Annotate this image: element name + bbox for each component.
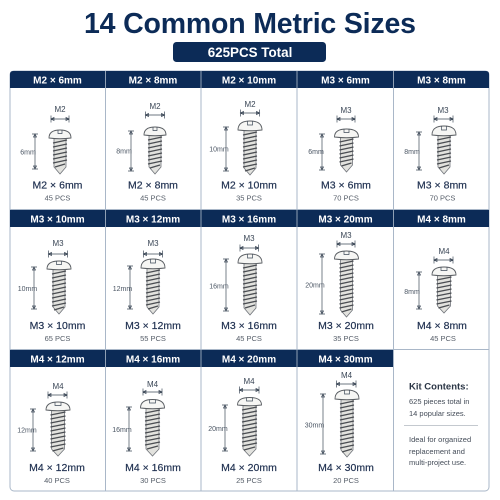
cell: M4 x 30mm: M4 × 30mm xyxy=(318,462,374,474)
header row 1 xyxy=(10,71,489,88)
title: 14 Common Metric Sizes xyxy=(84,8,416,40)
header row 2: M3 × 12mm xyxy=(126,214,180,226)
cell: M2 x 6mm: M2 × 6mm xyxy=(33,180,83,192)
cell: M4 x 12mm: 40 PCS xyxy=(44,476,70,485)
header row 1: M2 × 8mm xyxy=(129,76,177,86)
header row 1: M2 × 10mm xyxy=(222,76,276,86)
cell: M3 x 6mm: M3 xyxy=(340,106,352,115)
cell: M2 x 6mm: 45 PCS xyxy=(45,194,70,202)
cell: M3 x 20mm: 20mm xyxy=(305,282,325,290)
cell: M3 x 16mm xyxy=(209,234,277,343)
cell: M4 x 16mm xyxy=(112,380,181,485)
cell: M3 x 10mm: 10mm xyxy=(18,286,37,293)
cell: M4 x 8mm: M4 xyxy=(438,247,450,256)
header row 3: M4 × 20mm xyxy=(222,354,276,366)
cell: M2 x 8mm: M2 xyxy=(149,102,161,111)
cell: M2 x 8mm: 8mm xyxy=(116,148,132,156)
kit contents note: replacement and xyxy=(409,447,465,456)
cell: M4 x 12mm: 12mm xyxy=(17,428,37,434)
cell: M2 x 10mm xyxy=(209,100,277,202)
cell: M3 x 6mm xyxy=(308,106,371,202)
header row 3: M4 × 12mm xyxy=(30,354,85,366)
cell: M3 x 8mm: 70 PCS xyxy=(430,194,455,202)
cell: M3 x 8mm: M3 xyxy=(437,106,449,115)
cell: M4 x 20mm: 20mm xyxy=(208,426,228,433)
kit contents note: 14 popular sizes. xyxy=(409,409,466,418)
header row 1: M3 × 8mm xyxy=(417,76,466,86)
kit contents note xyxy=(404,382,478,467)
header row 3: M4 × 30mm xyxy=(318,354,373,366)
total badge xyxy=(173,42,326,62)
cell: M4 x 16mm: 16mm xyxy=(112,427,132,434)
header row 2: M3 × 10mm xyxy=(30,214,85,226)
cell: M3 x 20mm xyxy=(305,231,374,343)
cell: M3 x 12mm: 55 PCS xyxy=(140,334,166,343)
header row 2 xyxy=(10,210,489,227)
header row 1: M2 × 6mm xyxy=(33,76,82,86)
cell: M2 x 10mm: 10mm xyxy=(209,146,229,154)
cell: M4 x 20mm xyxy=(208,377,277,485)
header row 1: M3 × 6mm xyxy=(321,76,370,86)
cell: M3 x 20mm: 35 PCS xyxy=(333,334,359,343)
cell: M2 x 8mm: 45 PCS xyxy=(140,194,166,202)
cell: M4 x 16mm: M4 xyxy=(147,380,159,389)
cell: M3 x 16mm: M3 × 16mm xyxy=(221,320,277,332)
cell: M2 x 8mm xyxy=(116,102,178,202)
cell: M3 x 12mm: M3 × 12mm xyxy=(125,320,181,332)
cell: M4 x 8mm: 8mm xyxy=(404,289,420,296)
cell: M2 x 10mm: M2 × 10mm xyxy=(221,180,277,192)
cell: M4 x 20mm: M4 xyxy=(243,377,255,386)
cell: M4 x 12mm: M4 × 12mm xyxy=(29,462,85,474)
kit contents note: multi-project use. xyxy=(409,458,466,467)
cell: M3 x 8mm: M3 × 8mm xyxy=(417,180,467,192)
cell: M4 x 20mm: 25 PCS xyxy=(236,476,262,485)
cell: M4 x 8mm: M4 × 8mm xyxy=(417,320,467,332)
cell: M3 x 16mm: 45 PCS xyxy=(236,334,262,343)
cell: M4 x 12mm: M4 xyxy=(52,382,64,391)
cell: M3 x 6mm: 6mm xyxy=(308,149,324,156)
header row 2: M3 × 16mm xyxy=(222,214,276,226)
cell: M2 x 6mm xyxy=(20,105,83,202)
cell: M3 x 20mm: M3 xyxy=(340,231,352,240)
cell: M3 x 10mm: M3 × 10mm xyxy=(30,320,86,332)
cell: M3 x 8mm xyxy=(404,106,467,202)
cell: M2 x 10mm: M2 xyxy=(244,100,256,109)
cell: M2 x 10mm: 35 PCS xyxy=(236,194,262,202)
cell: M4 x 8mm: 45 PCS xyxy=(430,334,456,343)
cell: M4 x 16mm: M4 × 16mm xyxy=(125,462,181,474)
cell: M2 x 6mm: 6mm xyxy=(20,150,36,156)
cell: M3 x 20mm: M3 × 20mm xyxy=(318,320,374,332)
total badge: 625PCS Total xyxy=(208,45,292,60)
cell: M3 x 6mm: 70 PCS xyxy=(333,194,359,202)
cell: M4 x 30mm: 30mm xyxy=(305,422,324,430)
header row 3 xyxy=(10,350,393,367)
cell: M3 x 10mm: 65 PCS xyxy=(45,334,70,343)
kit contents note: Ideal for organized xyxy=(409,435,471,444)
cell: M3 x 12mm: 12mm xyxy=(113,286,132,293)
header row 2: M4 × 8mm xyxy=(417,214,466,226)
cell: M3 x 16mm: 16mm xyxy=(209,284,229,290)
header row 2: M3 × 20mm xyxy=(318,214,373,226)
cell: M4 x 16mm: 30 PCS xyxy=(140,476,166,485)
cell: M2 x 6mm: M2 xyxy=(54,105,66,114)
cell: M2 x 8mm: M2 × 8mm xyxy=(128,180,178,192)
cell: M3 x 16mm: M3 xyxy=(243,234,255,243)
cell: M4 x 30mm xyxy=(305,371,374,485)
cell: M4 x 8mm xyxy=(404,247,467,343)
header row 3: M4 × 16mm xyxy=(126,354,180,366)
cell: M3 x 12mm: M3 xyxy=(147,239,159,248)
cell: M4 x 30mm: M4 xyxy=(341,371,353,380)
kit contents note: 625 pieces total in xyxy=(409,397,469,406)
cell: M3 x 12mm xyxy=(113,239,181,343)
cell: M3 x 8mm: 8mm xyxy=(404,149,420,156)
cell: M3 x 10mm: M3 xyxy=(52,239,64,248)
cell: M4 x 30mm: 20 PCS xyxy=(333,476,359,485)
cell: M4 x 20mm: M4 × 20mm xyxy=(221,462,277,474)
cell: M4 x 12mm xyxy=(17,382,85,485)
kit contents note: Kit Contents: xyxy=(409,382,469,392)
cell: M3 x 6mm: M3 × 6mm xyxy=(321,180,371,192)
cell: M3 x 10mm xyxy=(18,239,86,343)
